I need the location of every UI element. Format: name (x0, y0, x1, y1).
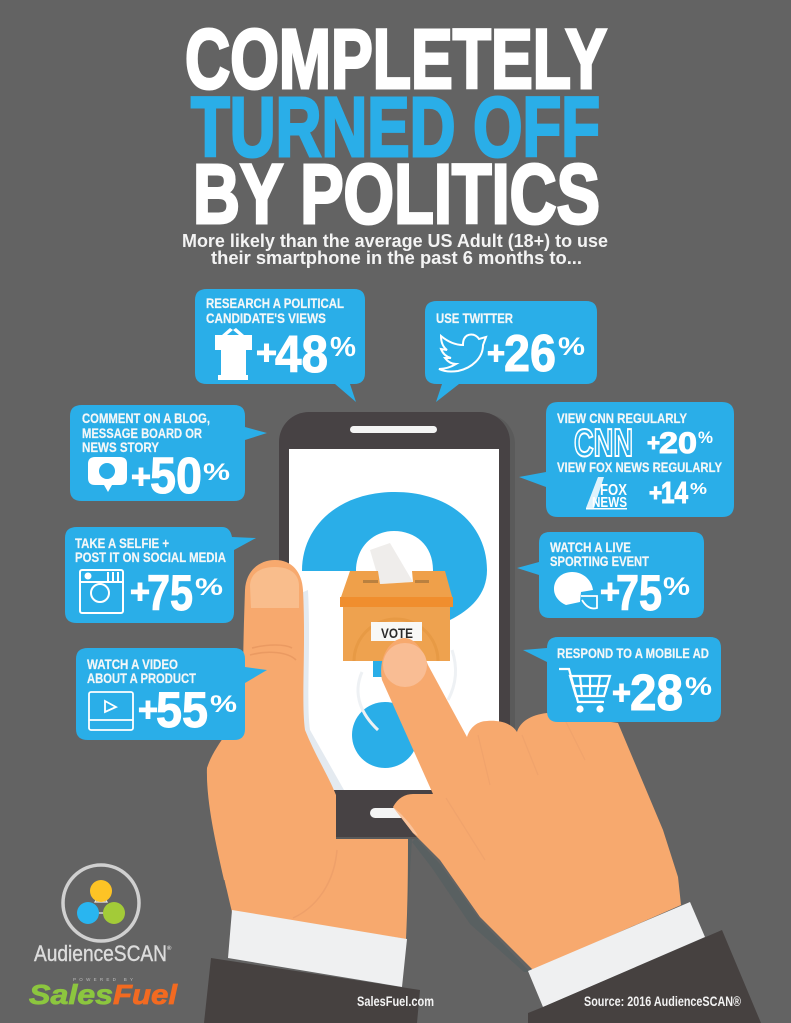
question mark dot (352, 702, 418, 768)
stat: +55%: + (138, 691, 158, 729)
logo: audiencescan: ® (167, 945, 172, 952)
callout: comment on a blog: NEWS STORY (82, 440, 159, 455)
icon: fox news logo (586, 477, 627, 511)
callout: cnn and fox news (519, 402, 734, 517)
stat: +48%: % (330, 331, 356, 362)
callout: comment on a blog: MESSAGE BOARD OR (82, 426, 202, 441)
callout: take a selfie: POST IT ON SOCIAL MEDIA (75, 550, 226, 565)
left jacket sleeve (204, 958, 420, 1023)
subtitle (182, 231, 608, 268)
stat: +20%: + (647, 430, 660, 457)
icon: cnn logo: CNN (574, 422, 633, 465)
callout: comment on a blog (70, 405, 267, 504)
icon: video player (89, 692, 133, 730)
title (185, 12, 607, 241)
ballot paper (370, 543, 413, 584)
stat: +48%: 48 (275, 326, 328, 384)
callout: use twitter (425, 301, 597, 402)
stat: +55%: 55 (156, 682, 208, 738)
stat: +48% (256, 326, 356, 384)
stat: +50% (131, 447, 230, 504)
thumbnail (250, 567, 299, 608)
stat: +75%: % (195, 574, 223, 601)
callout: take a selfie: TAKE A SELFIE + (75, 536, 169, 551)
callout: cnn and fox news: VIEW FOX NEWS REGULARLY (557, 460, 722, 475)
subtitle: their smartphone in the past 6 months to... (211, 248, 582, 268)
callout: watch a live sporting event (517, 532, 704, 621)
stat: +14% (649, 475, 707, 510)
icon: fox news logo: NEWS (592, 494, 627, 511)
stat: +26% (487, 325, 585, 383)
right hand (381, 638, 681, 972)
callout: research a candidate: RESEARCH A POLITICAL (206, 296, 344, 311)
stat: +20%: % (698, 428, 713, 447)
callout: watch a live sporting event: SPORTING EVENT (550, 554, 650, 569)
left thumb (207, 560, 344, 918)
logo: salesfuel: POWERED BY (73, 977, 133, 982)
callout: watch a live sporting event: WATCH A LIVE (550, 540, 631, 555)
icon: podium (215, 328, 252, 380)
touch ripple (358, 650, 455, 730)
stat: +75%: + (130, 573, 150, 611)
callout: take a selfie (65, 527, 256, 623)
icon: shopping cart (559, 669, 610, 712)
callout: watch a video (76, 648, 267, 740)
right shirt cuff (528, 902, 705, 1007)
title: BY POLITICS (193, 147, 600, 241)
stat: +55%: % (210, 691, 237, 718)
stat: +28%: + (612, 674, 631, 712)
icon: speech bubble (88, 457, 127, 492)
callout: respond to a mobile ad: RESPOND TO A MOBILE AD (557, 646, 709, 661)
left shirt cuff (228, 910, 407, 987)
vote label: VOTE (381, 625, 413, 641)
stat: +50%: + (131, 458, 151, 496)
icon: twitter bird (439, 334, 486, 372)
stat: +20%: 20 (659, 427, 697, 460)
stat: +50%: % (203, 459, 230, 486)
logo: audiencescan (34, 865, 172, 966)
stat: +50%: 50 (150, 447, 202, 504)
stat: +26%: + (487, 335, 505, 371)
callout: watch a video: ABOUT A PRODUCT (87, 671, 197, 686)
logo: audiencescan: AudienceSCAN (34, 941, 167, 966)
icon: football helmet (554, 572, 597, 608)
stat: +14%: + (649, 480, 662, 507)
stat: +26%: 26 (504, 325, 556, 383)
stat: +28%: % (685, 673, 712, 701)
title: TURNED OFF (191, 80, 600, 174)
callout: respond to a mobile ad (523, 637, 721, 722)
callout: research a candidate: CANDIDATE'S VIEWS (206, 311, 326, 326)
stat: +75% (130, 565, 223, 621)
stat: +20% (647, 427, 713, 460)
callout: research a candidate (195, 289, 365, 402)
stat: +28%: 28 (630, 664, 683, 721)
phone home button (370, 808, 406, 818)
stat: +75%: % (663, 573, 690, 601)
icon: fox news logo: FOX (600, 482, 627, 499)
footer: source: Source: 2016 AudienceSCAN® (584, 994, 741, 1009)
logo: salesfuel: Fuel (113, 979, 178, 1010)
logo: salesfuel (29, 977, 178, 1010)
callout: cnn and fox news: VIEW CNN REGULARLY (557, 411, 687, 426)
stat: +75% (600, 565, 690, 621)
stat: +28% (612, 664, 712, 721)
title: COMPLETELY (185, 12, 607, 106)
left hand palm (207, 700, 412, 940)
phone speaker (350, 426, 437, 433)
icon: instagram camera (80, 570, 123, 613)
subtitle: More likely than the average US Adult (18+) to use (182, 231, 608, 251)
callout: comment on a blog: COMMENT ON A BLOG, (82, 411, 210, 426)
stat: +14%: 14 (661, 475, 689, 510)
logo: salesfuel: Sales (29, 979, 113, 1010)
stat: +14%: % (690, 481, 707, 498)
stat: +55% (138, 682, 237, 738)
callout: watch a video: WATCH A VIDEO (87, 657, 178, 672)
callout: use twitter: USE TWITTER (436, 311, 513, 326)
right jacket sleeve (528, 930, 761, 1023)
index fingernail (383, 643, 427, 687)
stat: +75%: + (600, 573, 620, 611)
stat: +48%: + (256, 334, 277, 372)
smartphone (279, 412, 515, 839)
stat: +26%: % (558, 333, 585, 361)
question mark (302, 492, 487, 768)
stat: +75%: 75 (147, 565, 193, 621)
stat: +75%: 75 (616, 565, 662, 621)
phone screen (289, 449, 499, 790)
footer: website: SalesFuel.com (357, 994, 434, 1009)
ballot box (340, 543, 453, 661)
